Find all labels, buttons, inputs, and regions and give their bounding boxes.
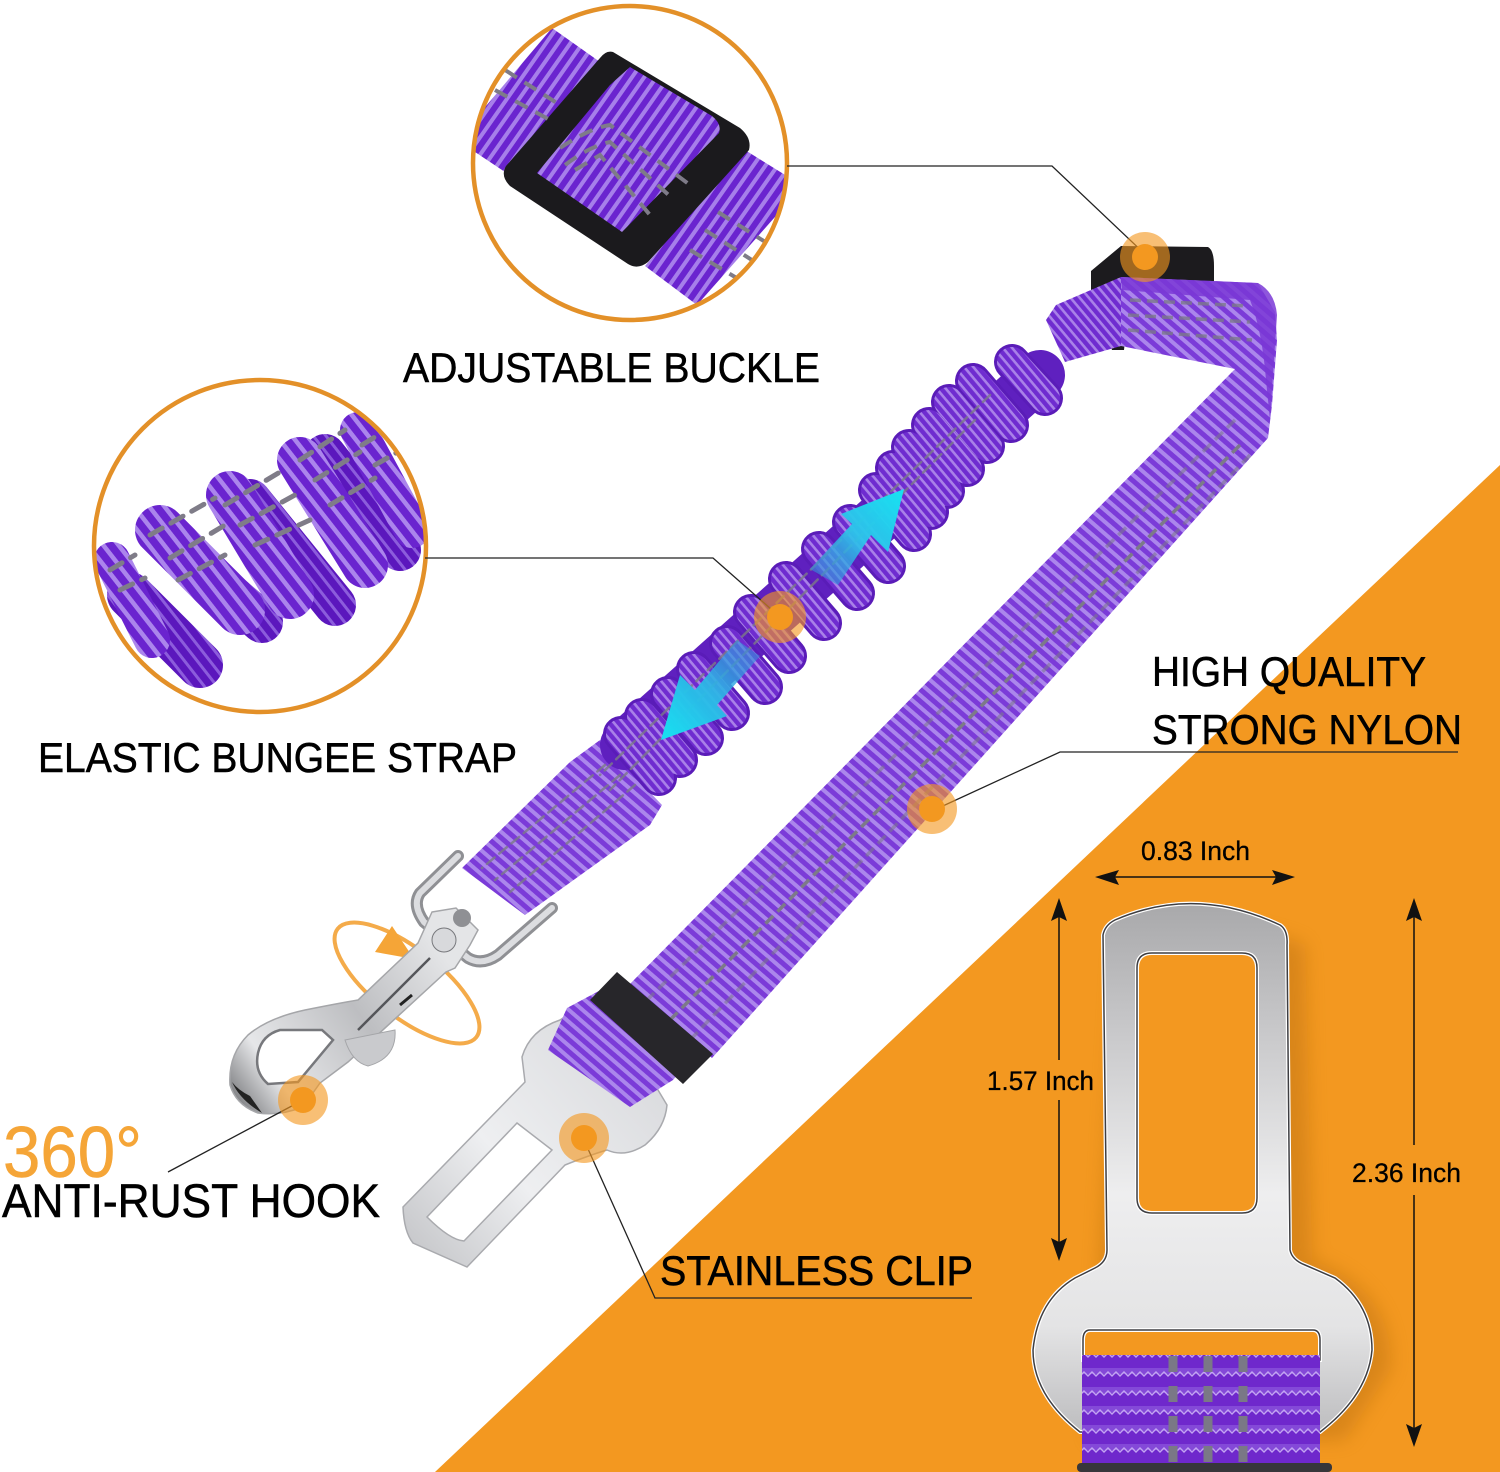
label: high quality strong nylon: STRONG NYLON — [1152, 706, 1462, 753]
hotspot: nylon — [907, 784, 957, 834]
dimension: total height: 2.36 Inch — [1352, 1158, 1461, 1188]
dimension: window height — [987, 898, 1094, 1261]
leader line: hook — [168, 1100, 303, 1172]
hotspot: bungee — [754, 591, 806, 643]
hotspot: clip — [559, 1113, 609, 1163]
leader line: buckle — [787, 166, 1148, 257]
large clip window background — [1080, 946, 1324, 1362]
label: anti-rust hook: ANTI-RUST HOOK — [2, 1174, 380, 1227]
large clip strap — [1077, 1355, 1332, 1472]
dimension: total height — [1352, 898, 1461, 1447]
cyan stretch arrow up — [810, 489, 904, 585]
strap end below sleeve — [548, 985, 690, 1107]
hotspot: hook — [278, 1075, 328, 1125]
leash: wide nylon strap — [628, 277, 1277, 1058]
dimension: width: 0.83 Inch — [1141, 836, 1250, 866]
rotation arc behind hook — [317, 902, 497, 1064]
label: high quality strong nylon — [1152, 648, 1462, 753]
leader line: clip — [584, 1140, 972, 1298]
black rubber sleeve — [590, 972, 713, 1084]
detail circle: adjustable buckle — [470, 6, 790, 320]
dimension: width — [1095, 836, 1295, 885]
label: 360 degree: 360° — [3, 1113, 142, 1193]
label: adjustable buckle: ADJUSTABLE BUCKLE — [403, 344, 820, 391]
seat belt clip small — [403, 1010, 667, 1267]
leader line: bungee — [425, 558, 780, 617]
label: stainless clip: STAINLESS CLIP — [660, 1247, 973, 1294]
hotspot: buckle — [1120, 232, 1170, 282]
dimension: window height: 1.57 Inch — [987, 1066, 1094, 1096]
large clip — [1033, 904, 1372, 1432]
large clip drop shadow — [1090, 925, 1390, 1440]
label: high quality strong nylon: HIGH QUALITY — [1152, 648, 1426, 695]
snap hook — [230, 856, 552, 1114]
cyan stretch arrow down — [661, 640, 760, 740]
orange diagonal panel — [435, 465, 1500, 1472]
label: elastic bungee strap: ELASTIC BUNGEE STRAP — [38, 734, 517, 781]
detail circle: elastic bungee — [94, 380, 426, 712]
leash: elastic bungee section — [462, 277, 1121, 915]
leash: plastic buckle — [1091, 246, 1214, 350]
leader line: nylon — [932, 752, 1458, 811]
